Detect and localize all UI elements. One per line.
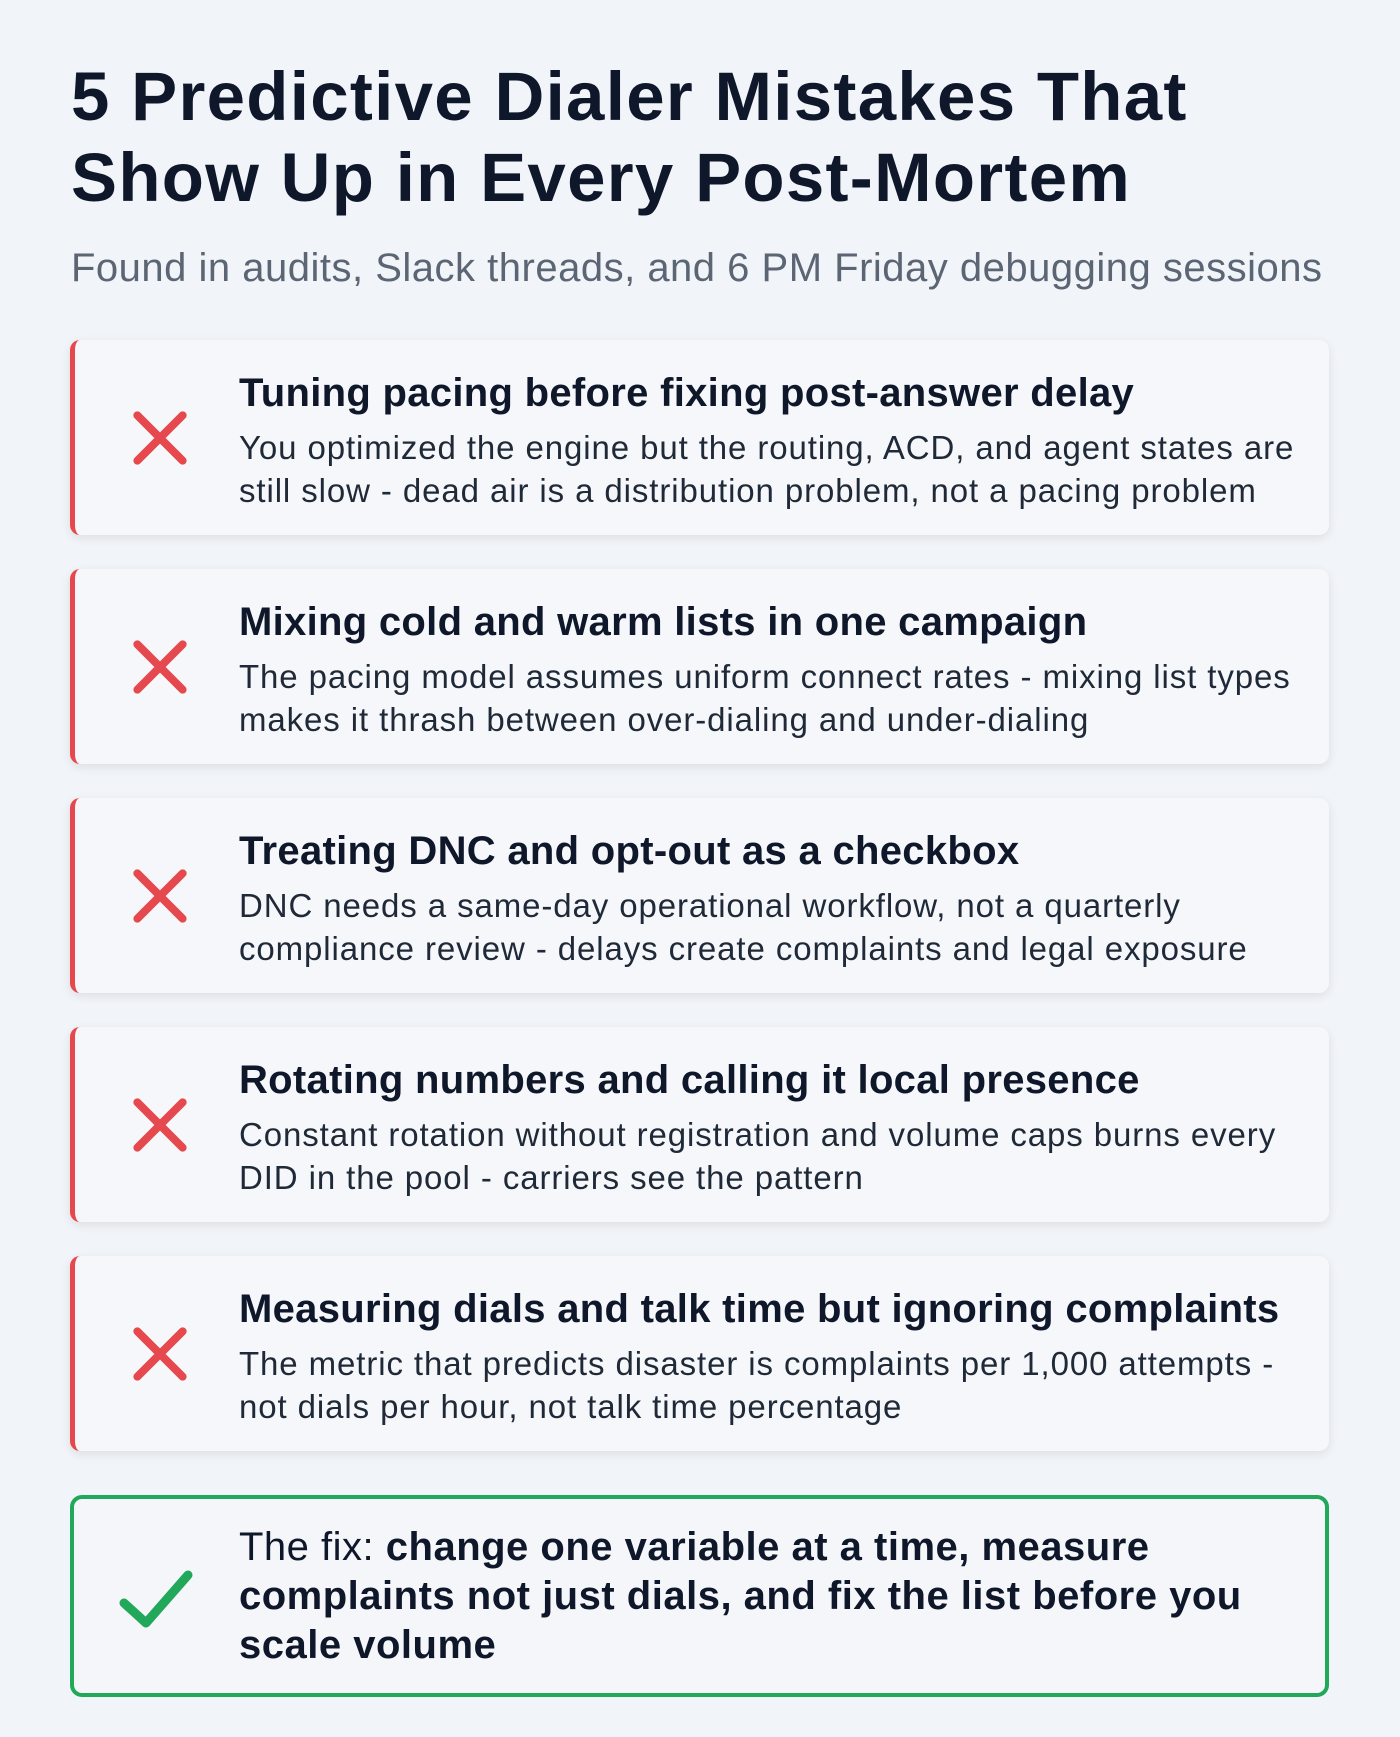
icon: red x [133, 411, 187, 465]
card: mistake 1: Tuning pacing before fixing post-answer delay [239, 371, 1134, 415]
callout: the fix: The fix: change one variable at a time, measure [239, 1525, 1150, 1569]
card: mistake 5: not dials per hour, not talk time percentage [239, 1388, 902, 1425]
title: 5 Predictive Dialer Mistakes That [71, 58, 1188, 135]
card: mistake 1: still slow - dead air is a distribution problem, not a pacing problem [239, 472, 1257, 509]
callout: the fix: complaints not just dials, and fix the list before you [239, 1574, 1242, 1618]
callout: the fix: scale volume [239, 1623, 496, 1667]
card: mistake 5 [70, 1256, 1329, 1451]
card: mistake 1: You optimized the engine but the routing, ACD, and agent states are [239, 429, 1294, 466]
card: mistake 2 [70, 569, 1329, 764]
card: mistake 3: DNC needs a same-day operational workflow, not a quarterly [239, 887, 1181, 924]
title [71, 58, 1188, 216]
callout: the fix [70, 1495, 1329, 1697]
card: mistake 5: Measuring dials and talk time but ignoring complaints [239, 1287, 1279, 1331]
card: mistake 3: Treating DNC and opt-out as a checkbox [239, 829, 1019, 873]
card: mistake 4 [70, 1027, 1329, 1222]
card: mistake 1 [70, 340, 1329, 535]
card: mistake 5: The metric that predicts disaster is complaints per 1,000 attempts - [239, 1345, 1274, 1382]
card: mistake 3 [70, 798, 1329, 993]
card: mistake 2: Mixing cold and warm lists in one campaign [239, 600, 1087, 644]
icon: red x [133, 1098, 187, 1152]
title: Show Up in Every Post-Mortem [71, 139, 1131, 216]
card: mistake 4: Rotating numbers and calling it local presence [239, 1058, 1140, 1102]
icon: red x [133, 869, 187, 923]
icon: green check [120, 1570, 192, 1628]
card: mistake 4: Constant rotation without registration and volume caps burns every [239, 1116, 1276, 1153]
card: mistake 2: makes it thrash between over-dialing and under-dialing [239, 701, 1089, 738]
card: mistake 4: DID in the pool - carriers see the pattern [239, 1159, 864, 1196]
icon: red x [133, 640, 187, 694]
card: mistake 2: The pacing model assumes uniform connect rates - mixing list types [239, 658, 1291, 695]
card: mistake 3: compliance review - delays create complaints and legal exposure [239, 930, 1248, 967]
icon: red x [133, 1327, 187, 1381]
subtitle: Found in audits, Slack threads, and 6 PM Friday debugging sessions [71, 246, 1322, 290]
